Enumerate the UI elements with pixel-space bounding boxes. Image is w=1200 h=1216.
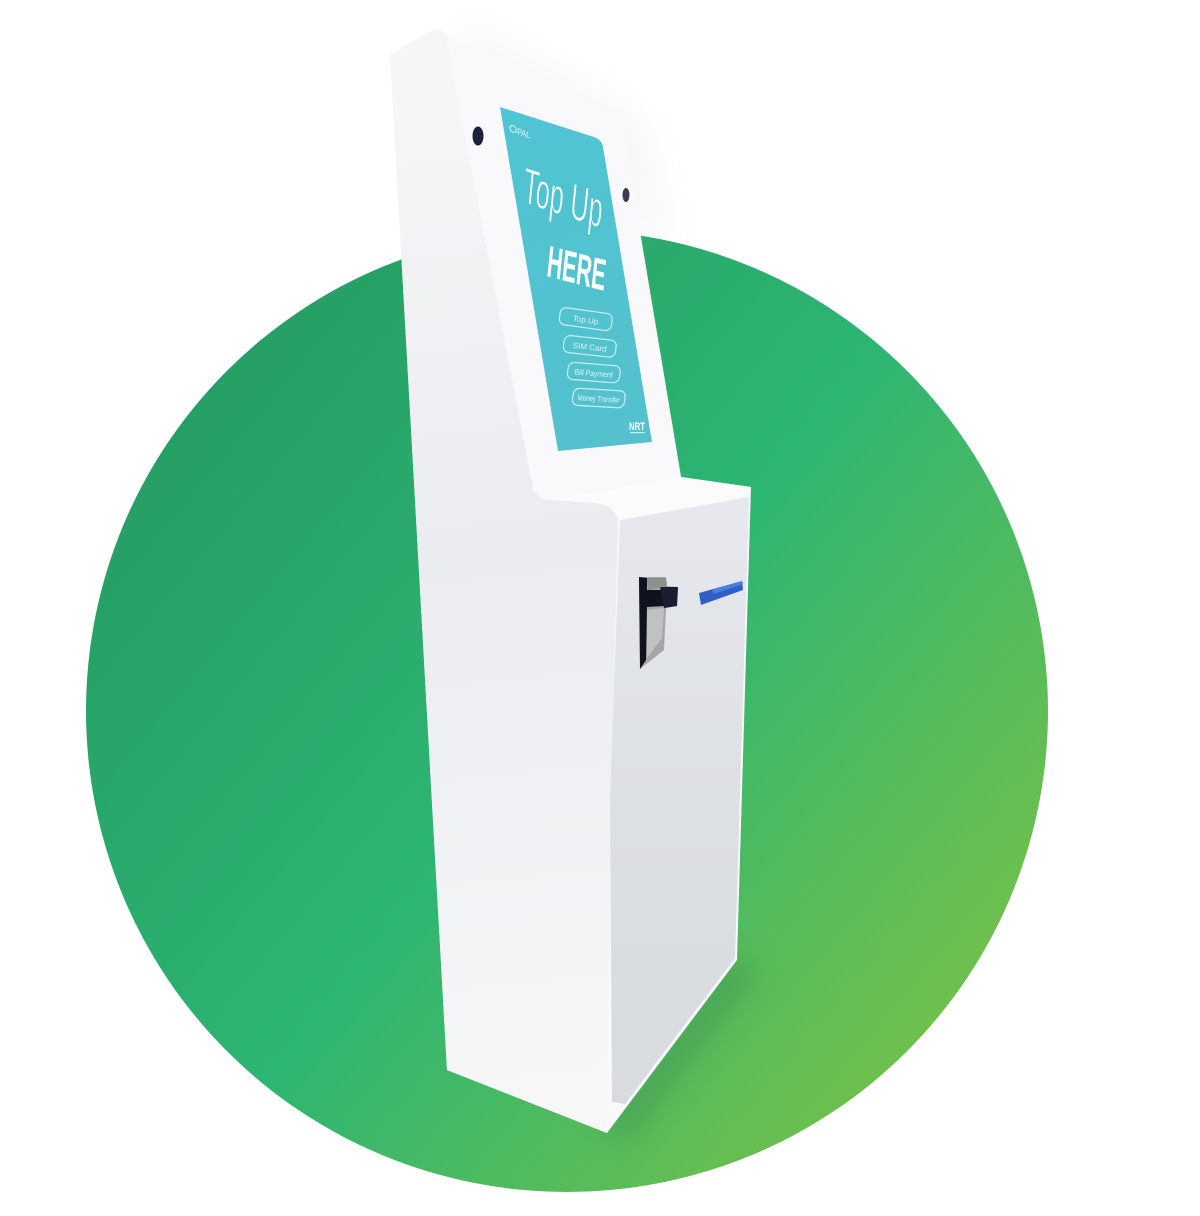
screen panel bbox=[500, 107, 652, 451]
left front face bbox=[390, 29, 618, 1133]
cash slot bbox=[639, 577, 678, 669]
menu button: top up bbox=[559, 307, 613, 331]
side panel bbox=[610, 497, 749, 1104]
kiosk body bbox=[390, 29, 751, 1133]
camera left bbox=[472, 126, 484, 146]
menu button: top up: Top Up bbox=[572, 314, 599, 326]
card reader slot bbox=[699, 581, 743, 605]
logo: opal: PAL bbox=[517, 126, 530, 140]
logo: nrt: NRT bbox=[629, 421, 645, 433]
menu button: bill payment: Bill Payment bbox=[574, 368, 614, 380]
shadow below the kiosk base bbox=[615, 965, 745, 1135]
menu button: bill payment bbox=[567, 362, 621, 383]
logo: opal bbox=[510, 124, 530, 140]
menu button: money transfer: Money Transfer bbox=[577, 393, 621, 405]
menu button: sim card bbox=[563, 335, 617, 358]
top shelf bbox=[552, 477, 751, 520]
head face bbox=[445, 33, 681, 500]
white silhouette bbox=[390, 29, 751, 1133]
headline: top up: Top Up bbox=[521, 157, 605, 239]
touch screen bbox=[500, 107, 652, 451]
green gradient circle bbox=[86, 230, 1048, 1192]
menu button: sim card: SIM Card bbox=[572, 341, 607, 354]
shadow behind the kiosk head bbox=[460, 45, 648, 240]
camera right bbox=[622, 188, 630, 202]
headline: here: HERE bbox=[545, 238, 608, 301]
menu button: money transfer bbox=[572, 388, 626, 408]
